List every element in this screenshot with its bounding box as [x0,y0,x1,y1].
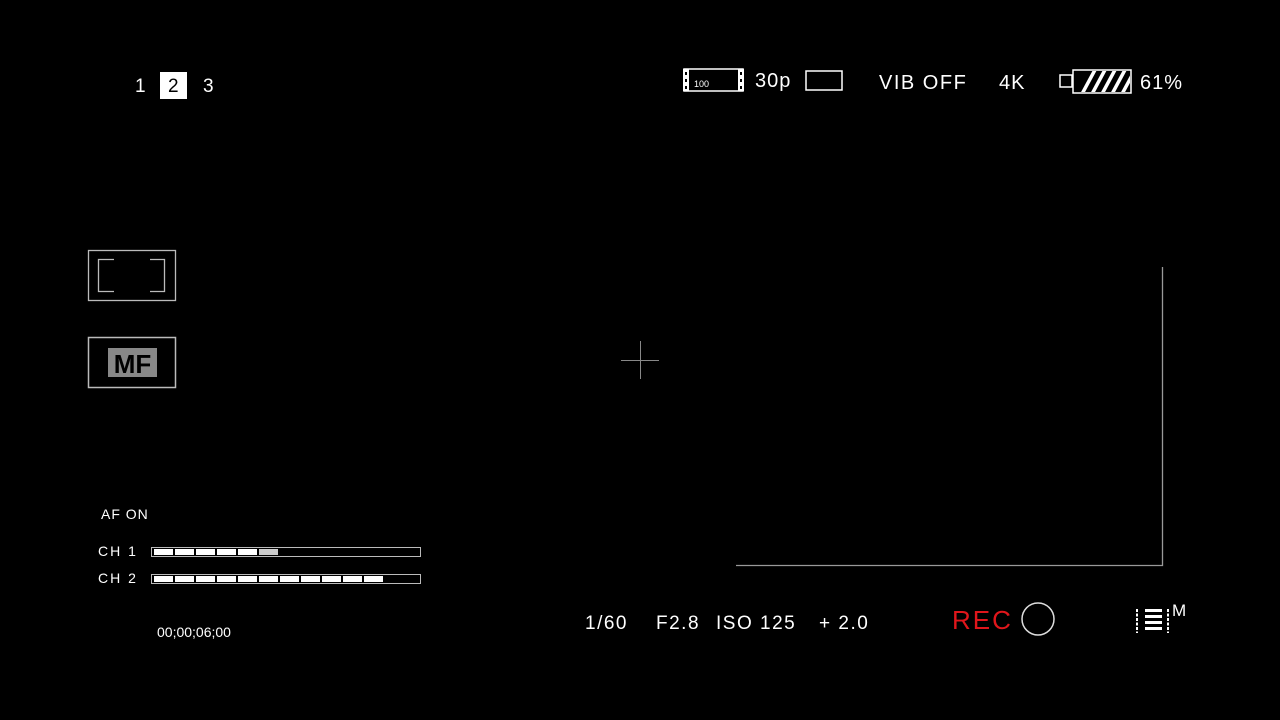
icon: focus area [88,250,176,300]
exposure settings: + 2.0 [819,613,869,634]
page selector [135,72,214,99]
timecode: 00;00;06;00 [157,624,231,640]
battery percent: 61% [1140,72,1183,94]
audio meters [98,543,420,586]
AF ON: AF ON [101,506,149,522]
icon: aspect frame [806,71,842,90]
icon: MF [88,338,176,388]
crosshair [621,341,659,379]
icon: battery [1060,68,1136,94]
icon: menu [1137,601,1186,633]
page selector: 3 [203,76,214,97]
icon: film card 100: 100 [694,79,709,89]
exposure settings: ISO 125 [716,613,796,634]
exposure settings: F2.8 [656,613,700,634]
icon: film card 100 [683,69,744,91]
audio meters: CH 1 [98,543,138,559]
frame guide [736,267,1162,566]
page selector: 1 [135,76,146,97]
exposure settings: 1/60 [585,613,628,634]
frame rate: 30p [755,70,791,92]
page selector: 2 [168,76,179,97]
VIB OFF: VIB OFF [879,72,967,94]
REC label: REC [952,605,1013,635]
exposure settings [585,613,869,634]
4K: 4K [999,72,1025,94]
icon: MF: MF [114,349,151,379]
icon: menu: M [1172,601,1186,620]
record button [1022,603,1054,635]
audio meters: CH 2 [98,570,138,586]
